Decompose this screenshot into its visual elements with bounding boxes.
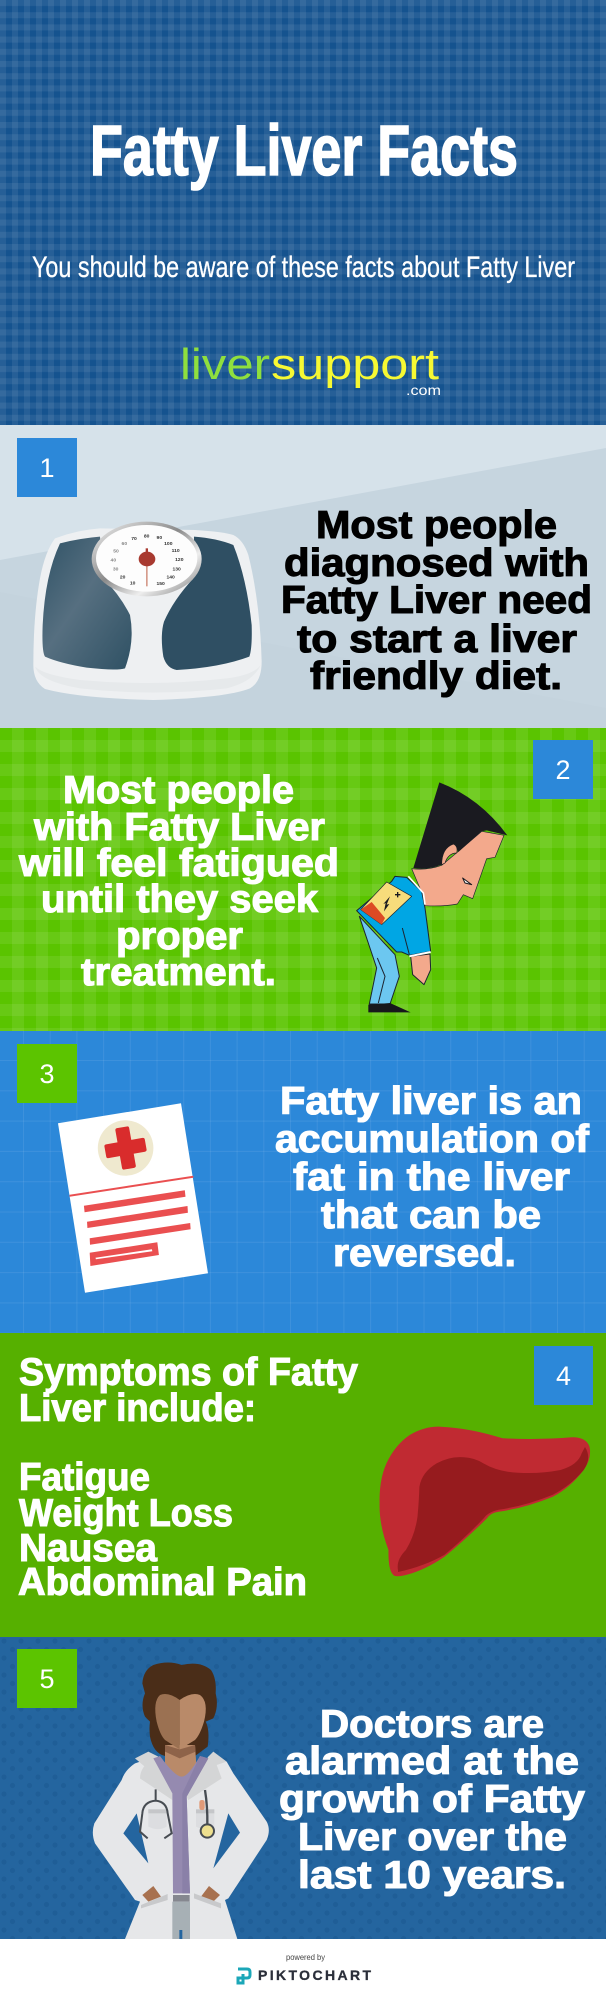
text: fact 5: Doctors are <box>320 1703 544 1746</box>
number badge 1: 1 <box>39 453 55 483</box>
icon: bathroom scale: 40 <box>111 557 116 563</box>
text: symptoms list: Abdominal Pain <box>18 1561 307 1604</box>
icon: bathroom scale: 50 <box>113 549 119 555</box>
text: fact 2: Most people <box>63 769 294 812</box>
icon: tired man with low battery <box>357 782 507 1012</box>
number badge 5 <box>17 1649 77 1708</box>
footer: powered by Piktochart: powered by <box>286 1952 326 1962</box>
text: fact 3: fat in the liver <box>293 1156 570 1199</box>
panel: fact 4 <box>0 1333 606 1637</box>
text: fact 1: Fatty Liver need <box>281 579 592 622</box>
icon: bathroom scale: 150 <box>157 581 165 587</box>
text: fact 1: Most people <box>316 504 557 547</box>
logo: liversupport.com: .com <box>406 382 441 398</box>
icon: bathroom scale: 60 <box>122 541 127 547</box>
icon: bathroom scale: 130 <box>173 567 181 573</box>
text: fact 3: accumulation of <box>275 1118 589 1161</box>
text: fact 5 <box>279 1703 586 1897</box>
text: fact 3 <box>275 1080 589 1275</box>
icon: bathroom scale: 20 <box>120 575 126 581</box>
text: fact 1: diagnosed with <box>284 542 589 585</box>
text: fact 1 <box>281 504 592 698</box>
text: symptoms list: Liver include: <box>19 1387 256 1430</box>
icon: bathroom scale: 140 <box>167 575 175 581</box>
text: fact 2: with Fatty Liver <box>33 806 325 849</box>
panel: fact 1 <box>0 425 606 728</box>
text: fact 1: friendly diet. <box>310 655 562 698</box>
icon: bathroom scale: 100 <box>164 541 173 547</box>
logo: liversupport.com: liver <box>180 340 270 389</box>
icon: bathroom scale: 30 <box>113 567 119 573</box>
text: fact 3: reversed. <box>333 1232 516 1275</box>
number badge 1 <box>17 438 77 497</box>
icon: bathroom scale: 120 <box>175 557 184 563</box>
number badge 5: 5 <box>39 1664 55 1694</box>
text: fact 2: treatment. <box>81 951 276 994</box>
footer: powered by Piktochart <box>0 1939 606 2000</box>
text: fact 2 <box>18 769 339 994</box>
icon: piktochart logo <box>238 1969 250 1983</box>
footer: powered by Piktochart: PIKTOCHART <box>258 1967 371 1983</box>
text: fact 5: last 10 years. <box>298 1854 566 1897</box>
text: symptoms list: Nausea <box>19 1527 158 1570</box>
logo: liversupport.com: support <box>271 340 439 389</box>
icon: bathroom scale: 110 <box>172 548 180 554</box>
icon: bathroom scale <box>33 522 262 700</box>
icon: bathroom scale: 70 <box>131 536 137 542</box>
icon: liver <box>380 1427 590 1576</box>
text: symptoms list <box>18 1351 359 1604</box>
text: fact 3: Fatty liver is an <box>280 1080 582 1123</box>
text: fact 5: alarmed at the <box>285 1740 579 1783</box>
number badge 4 <box>534 1346 593 1405</box>
text: fact 3: that can be <box>321 1194 541 1237</box>
text: symptoms list: Fatigue <box>19 1456 150 1499</box>
panel: fact 2 <box>0 728 606 1031</box>
icon: doctor <box>93 1662 269 1939</box>
text: fact 2: will feel fatigued <box>18 842 339 885</box>
number badge 2: 2 <box>555 755 571 785</box>
icon: bathroom scale: 90 <box>157 535 162 541</box>
logo: liversupport.com <box>180 340 441 398</box>
panel: fact 5 <box>0 1637 606 1939</box>
panel: header <box>0 0 606 425</box>
text: fact 5: growth of Fatty <box>279 1778 586 1821</box>
text: symptoms list: Weight Loss <box>19 1492 233 1535</box>
text: fact 2: proper <box>116 915 243 958</box>
number badge 3: 3 <box>39 1059 55 1089</box>
number badge 2 <box>533 740 593 799</box>
text: symptoms list: Symptoms of Fatty <box>19 1351 359 1394</box>
text: fact 1: to start a liver <box>297 618 577 661</box>
text: fact 2: until they seek <box>41 878 319 921</box>
number badge 3 <box>17 1044 77 1103</box>
icon: bathroom scale: 10 <box>130 581 136 587</box>
icon: bathroom scale: 80 <box>144 534 150 540</box>
panel: fact 3 <box>0 1031 606 1333</box>
text: fact 5: Liver over the <box>298 1816 567 1859</box>
icon: medical report <box>58 1103 208 1293</box>
number badge 4: 4 <box>556 1361 571 1391</box>
